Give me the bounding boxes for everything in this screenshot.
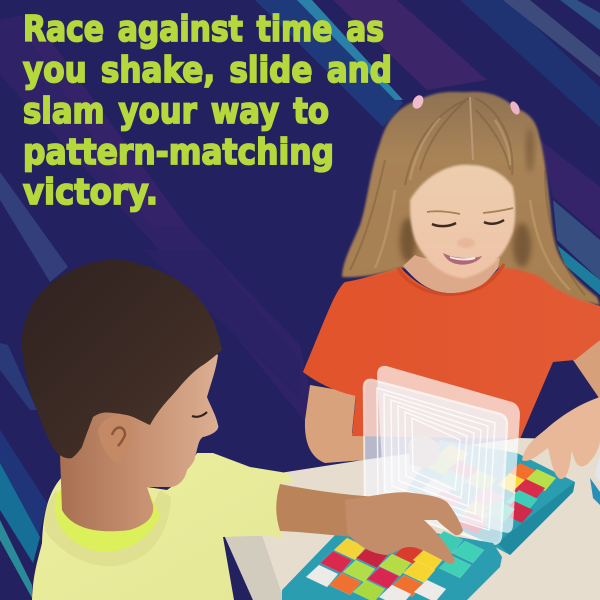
boy yellow sweater [32, 453, 295, 600]
game: transparent lid [364, 367, 519, 544]
boy [22, 260, 463, 600]
headline text: pattern-matching [23, 132, 334, 173]
girl neck [403, 255, 500, 293]
game: back tray [400, 435, 575, 555]
headline text: you shake, slide and [23, 50, 392, 91]
headline text: Race against time as [23, 9, 384, 50]
nose shadow [457, 238, 475, 248]
hair parting [470, 97, 473, 160]
headline text: slam your way to [23, 91, 329, 132]
smile [443, 253, 482, 265]
hair shadow beside face [400, 218, 416, 262]
neon inner collar [55, 490, 160, 552]
sweater collar band [44, 490, 171, 566]
back tray tiles [421, 444, 556, 534]
small game piece at right edge [590, 455, 600, 505]
boy eye [192, 412, 207, 417]
purple streak left [0, 15, 320, 440]
eyes and brows [432, 220, 504, 226]
girl [303, 92, 600, 463]
boy hand on game [345, 492, 463, 564]
boy neck and face [60, 340, 218, 531]
girl shirt collar [398, 264, 504, 295]
pink hair ties [411, 94, 425, 110]
hair strands [350, 98, 585, 295]
streaks right [540, 140, 600, 237]
headline text [23, 9, 392, 213]
streaks lower left [0, 172, 68, 282]
girl hair and pigtails [342, 92, 600, 305]
boy arm [276, 484, 380, 538]
girl right hand [522, 397, 600, 479]
blue and teal streak top [255, 0, 403, 127]
boy ear [98, 415, 132, 462]
headline text: victory. [23, 172, 158, 213]
front tray tiles [306, 531, 484, 600]
hand seen behind lid [408, 435, 440, 468]
table [225, 438, 600, 600]
girl arm left [305, 385, 365, 463]
girl orange shirt [303, 258, 600, 439]
girl face [410, 165, 515, 278]
lid concentric ridges [377, 388, 495, 530]
game: front tray [282, 531, 502, 600]
girl arm right [573, 340, 600, 400]
boy hair [22, 260, 222, 458]
